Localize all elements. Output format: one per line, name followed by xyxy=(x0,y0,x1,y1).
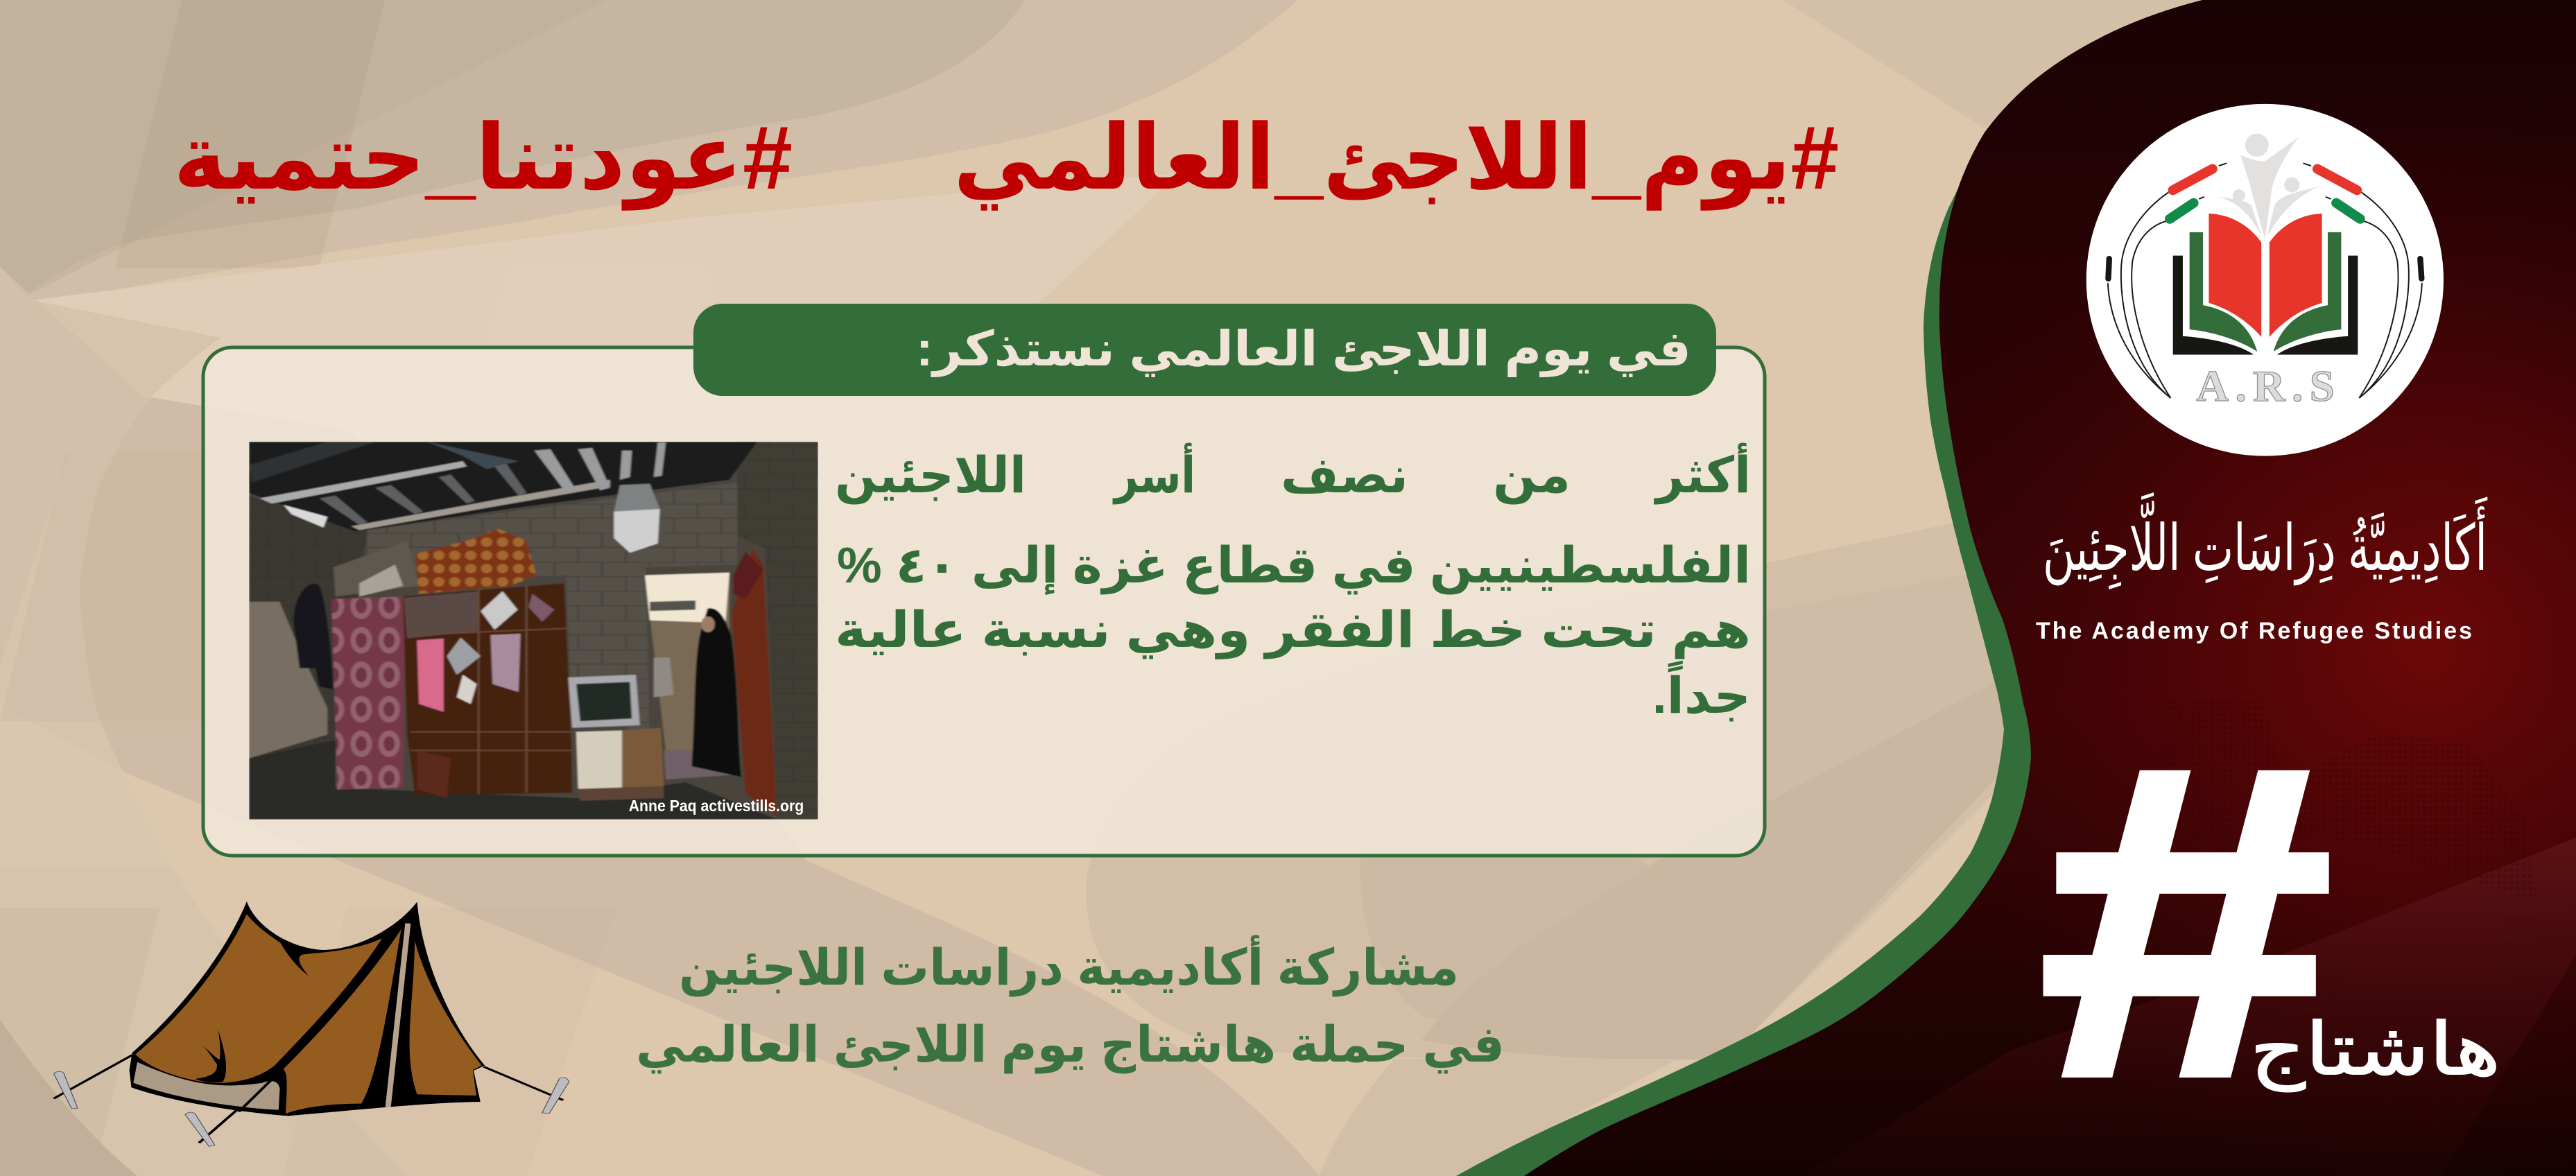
title: hashtag world refugee day: #يوم_اللاجئ_العالمي xyxy=(953,107,1839,211)
body line 3: هم تحت خط الفقر وهي نسبة عالية xyxy=(835,603,1751,659)
body line 2: الفلسطينيين في قطاع غزة إلى ٤٠ % xyxy=(837,538,1751,595)
body line 1: أكثر xyxy=(1654,442,1751,505)
academy english name: The Academy Of Refugee Studies xyxy=(2036,618,2472,644)
logo: figures xyxy=(2218,134,2321,239)
tent wrinkle xyxy=(195,1030,226,1082)
heading text: في يوم اللاجئ العالمي نستذكر: xyxy=(916,322,1691,378)
hashtag word: هاشتاج xyxy=(2250,1010,2500,1091)
logo: open book xyxy=(2173,214,2358,355)
front rope over sheet xyxy=(239,1080,270,1112)
body line 1: أسر xyxy=(1112,442,1195,505)
campaign text xyxy=(636,935,1505,1074)
photo credit: Anne Paq activestills.org xyxy=(629,797,804,815)
panel heading pill xyxy=(693,304,1716,396)
tent door flap xyxy=(284,929,401,1114)
body text xyxy=(835,442,1751,724)
dark red side panel xyxy=(1456,0,2576,1176)
tent body outline xyxy=(130,901,485,1116)
campaign line 2: في حملة هاشتاج يوم اللاجئ العالمي xyxy=(636,1017,1505,1074)
panel: main content box xyxy=(203,347,1765,856)
tent pole xyxy=(388,924,408,1107)
tent pegs xyxy=(53,1071,569,1146)
body line 1 xyxy=(835,442,1751,505)
tent ropes xyxy=(53,1055,563,1143)
photo: refugee home interior xyxy=(249,442,818,820)
body line 1: اللاجئين xyxy=(835,448,1026,505)
body line 1: نصف xyxy=(1281,448,1408,503)
tent right panel xyxy=(410,941,482,1096)
tent ground sheet xyxy=(133,1062,280,1110)
logo: A.R.S lettering: A.R.S xyxy=(2196,361,2335,410)
logo: reeds xyxy=(2108,163,2422,398)
icon: tent xyxy=(53,901,569,1146)
body line 1: من xyxy=(1493,448,1571,505)
logo: academy of refugee studies emblem xyxy=(2086,104,2444,456)
green curved band xyxy=(1456,108,2080,1176)
body line 4: جداً. xyxy=(1652,660,1751,724)
campaign line 1: مشاركة أكاديمية دراسات اللاجئين xyxy=(679,935,1459,997)
big hash symbol: # xyxy=(2040,678,2331,1166)
tent left panel xyxy=(135,914,382,1083)
title: hashtag our return is inevitable: #عودتنا_حتمية xyxy=(173,107,793,211)
